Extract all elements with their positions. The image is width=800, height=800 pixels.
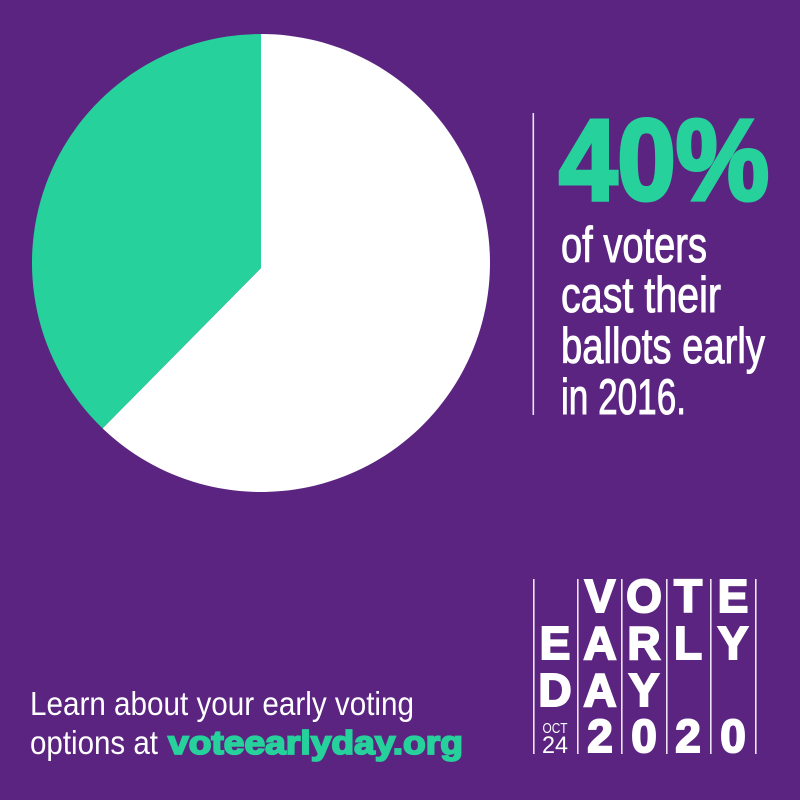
Vote Early Day 2020 logo: 2	[587, 710, 613, 762]
website link: voteearlyday.org	[168, 724, 463, 761]
statistic description: cast their	[561, 267, 721, 323]
statistic description: in 2016.	[561, 369, 686, 425]
Vote Early Day 2020 logo: E	[718, 570, 748, 622]
date: Oct 24	[542, 720, 568, 759]
Vote Early Day 2020 logo: Y	[718, 617, 748, 669]
Vote Early Day 2020 logo: 2	[675, 710, 701, 762]
statistic panel	[532, 96, 769, 425]
call to action text	[30, 685, 463, 761]
date: Oct 24: OCT	[542, 720, 568, 737]
Vote Early Day 2020 logo: L	[674, 617, 702, 669]
Vote Early Day 2020 logo	[533, 570, 757, 762]
Vote Early Day 2020 logo: 0	[631, 710, 657, 762]
Vote Early Day 2020 logo: D	[538, 664, 572, 716]
Vote Early Day 2020 logo: E	[540, 617, 570, 669]
Vote Early Day 2020 logo: O	[626, 570, 662, 622]
date: Oct 24: 24	[542, 732, 568, 759]
Vote Early Day 2020 logo: A	[583, 664, 617, 716]
Vote Early Day 2020 logo: A	[583, 617, 617, 669]
statistic description	[561, 217, 765, 425]
statistic description: of voters	[561, 217, 707, 273]
pie chart	[32, 34, 490, 492]
Vote Early Day 2020 logo: T	[674, 570, 702, 622]
Vote Early Day 2020 logo: 0	[720, 710, 746, 762]
Vote Early Day 2020 logo: V	[585, 570, 616, 622]
heading: 40%: 40%	[559, 96, 769, 224]
call to action text: options at	[30, 724, 158, 761]
call to action text: Learn about your early voting	[30, 685, 414, 722]
Vote Early Day 2020 logo: Y	[629, 664, 659, 716]
Vote Early Day 2020 logo: R	[627, 617, 661, 669]
